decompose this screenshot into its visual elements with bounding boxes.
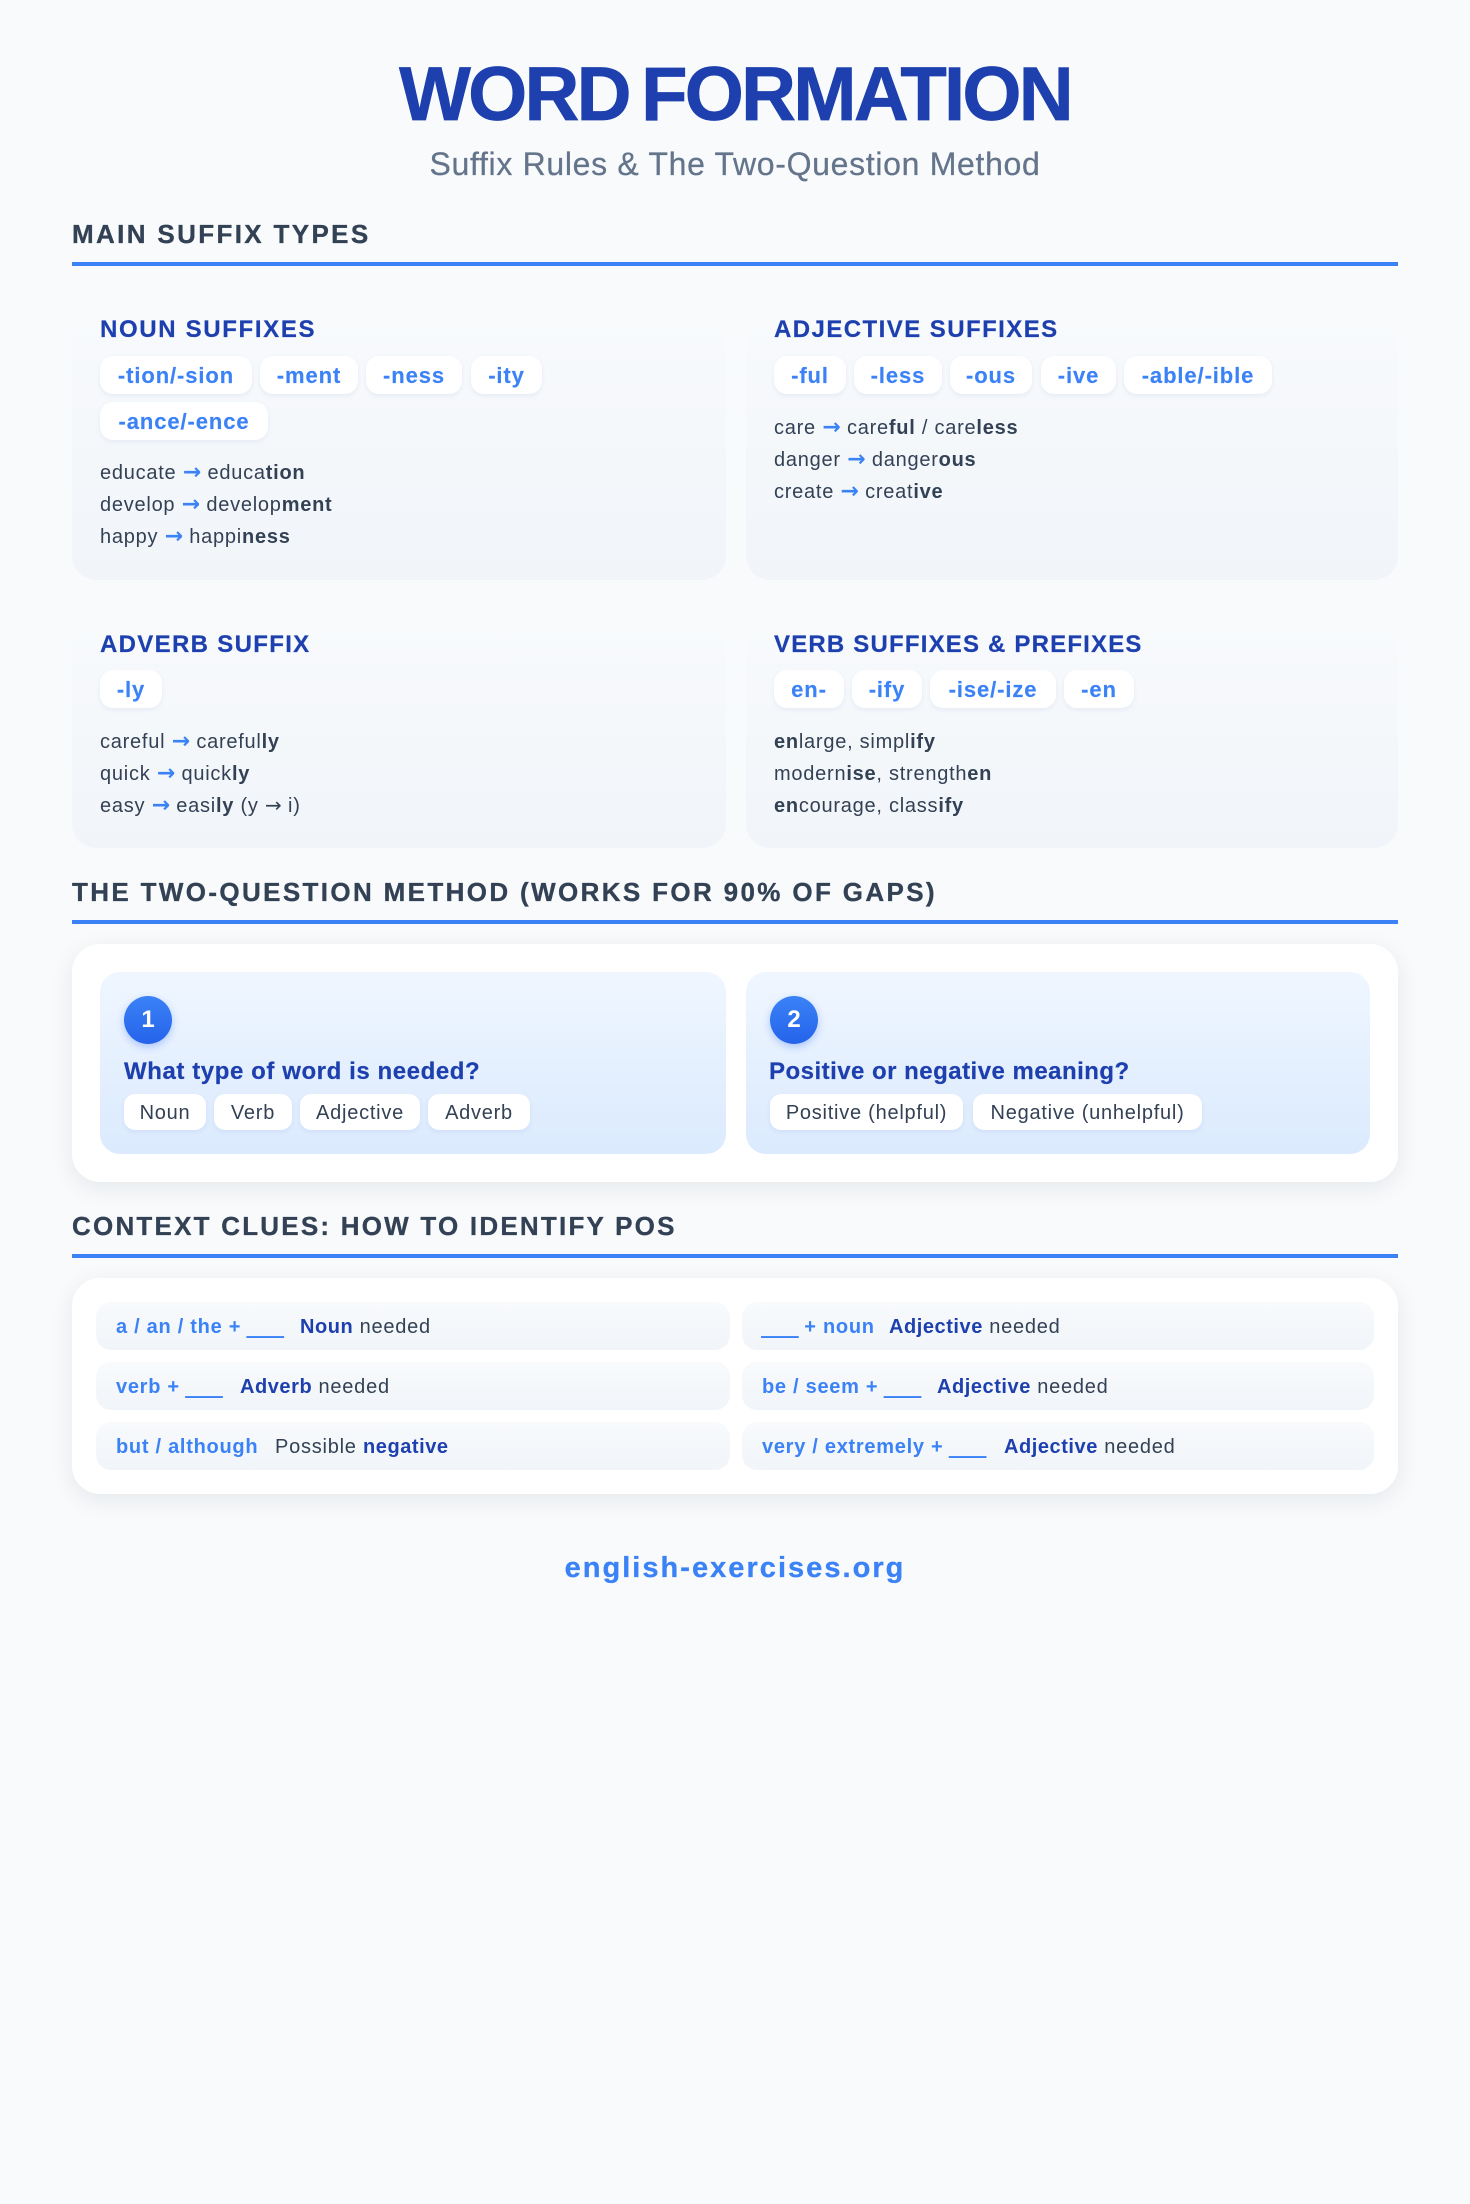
clue: article: Noun needed [300, 1316, 431, 1338]
heading: two-question method: THE TWO-QUESTION METHOD (WORKS FOR 90% OF GAPS) [72, 877, 937, 907]
verb suffix chips [774, 670, 1134, 710]
noun heading: NOUN SUFFIXES [100, 316, 316, 343]
clue: intensifier: very / extremely + ____ [762, 1434, 986, 1458]
clue: contrast: Possible negative [275, 1436, 449, 1458]
clue: after verb: verb + ____ [116, 1374, 222, 1398]
adverb examples [100, 729, 301, 818]
adjective suffix chips: -ive [1058, 363, 1099, 388]
adverb examples: quick → quickly [100, 761, 250, 786]
clue: after verb [96, 1362, 730, 1410]
verb suffix chips: -ify [869, 677, 905, 702]
word type tags: Noun [140, 1102, 190, 1124]
word type tags: Verb [231, 1102, 275, 1124]
number badge 2 [770, 996, 818, 1044]
meaning tags: Negative (unhelpful) [990, 1102, 1184, 1124]
adverb examples: easy → easily (y → i) [100, 793, 301, 818]
noun suffix chips: -tion/-sion [118, 363, 234, 388]
adjective suffix chips: -less [871, 363, 925, 388]
noun suffix chips: -ment [277, 363, 341, 388]
adverb examples: careful → carefully [100, 729, 280, 754]
verb heading: VERB SUFFIXES & PREFIXES [774, 631, 1143, 658]
adjective examples: care → careful / careless [774, 415, 1018, 440]
adjective heading: ADJECTIVE SUFFIXES [774, 316, 1059, 343]
meaning tags: Positive (helpful) [786, 1102, 947, 1124]
noun suffix chips: -ity [488, 363, 525, 388]
question 1 [100, 972, 726, 1154]
clue: intensifier [742, 1422, 1374, 1470]
adjective examples: create → creative [774, 479, 943, 504]
word type tags [124, 1094, 530, 1132]
panel: adjective suffixes [746, 306, 1398, 580]
meaning tags [770, 1094, 1202, 1132]
adjective suffix chips [774, 356, 1272, 396]
clue: be or seem: be / seem + ____ [762, 1374, 921, 1398]
clue: contrast: but / although [116, 1436, 258, 1458]
adjective suffix chips: -able/-ible [1142, 363, 1254, 388]
verb suffix chips: -ise/-ize [949, 677, 1037, 702]
panel: noun suffixes [72, 306, 726, 580]
noun examples [100, 460, 332, 549]
verb suffix chips: en- [791, 677, 827, 702]
question 2 [746, 972, 1370, 1154]
panel: two-question method [72, 944, 1398, 1182]
subtitle: Suffix Rules & The Two-Question Method [429, 146, 1041, 182]
word type tags: Adverb [445, 1102, 513, 1124]
clue: article [96, 1302, 730, 1350]
noun examples: happy → happiness [100, 524, 291, 549]
clue: before noun: Adjective needed [889, 1316, 1061, 1338]
verb examples: modernise, strengthen [774, 763, 992, 785]
noun suffix chips: -ness [383, 363, 445, 388]
adverb heading: ADVERB SUFFIX [100, 631, 311, 658]
clue: contrast [96, 1422, 730, 1470]
verb examples [774, 731, 992, 817]
number badge 1: 1 [141, 1006, 155, 1033]
adjective suffix chips: -ful [791, 363, 829, 388]
clue: after verb: Adverb needed [240, 1376, 390, 1398]
panel: verb suffixes and prefixes [746, 617, 1398, 848]
word type tags: Adjective [316, 1102, 404, 1124]
noun suffix chips: -ance/-ence [119, 409, 249, 434]
adjective examples: danger → dangerous [774, 447, 976, 472]
question 1 text: What type of word is needed? [124, 1058, 480, 1085]
clue: before noun: ____ + noun [761, 1314, 875, 1338]
clue: article: a / an / the + ____ [116, 1314, 283, 1338]
number badge 2: 2 [787, 1006, 801, 1033]
adjective examples [774, 415, 1018, 504]
noun suffix chips [100, 356, 542, 442]
adjective suffix chips: -ous [966, 363, 1016, 388]
verb examples: enlarge, simplify [774, 731, 936, 753]
panel: adverb suffix [72, 617, 726, 848]
verb suffix chips: -en [1081, 677, 1117, 702]
question 2 text: Positive or negative meaning? [769, 1058, 1130, 1085]
clue: be or seem [742, 1362, 1374, 1410]
footer: website: english-exercises.org [565, 1552, 905, 1584]
clue: before noun [742, 1302, 1374, 1350]
panel: context clues [72, 1278, 1398, 1494]
verb examples: encourage, classify [774, 795, 964, 817]
heading: context clues: CONTEXT CLUES: HOW TO IDENTIFY POS [72, 1211, 677, 1241]
adverb suffix chip [100, 670, 162, 708]
adverb suffix chip: -ly [117, 677, 145, 702]
title: WORD FORMATION [399, 52, 1071, 137]
clue: intensifier: Adjective needed [1004, 1436, 1176, 1458]
clue: be or seem: Adjective needed [937, 1376, 1109, 1398]
noun examples: develop → development [100, 492, 332, 517]
heading: main suffix types: MAIN SUFFIX TYPES [72, 219, 371, 249]
noun examples: educate → education [100, 460, 305, 485]
number badge 1 [124, 996, 172, 1044]
